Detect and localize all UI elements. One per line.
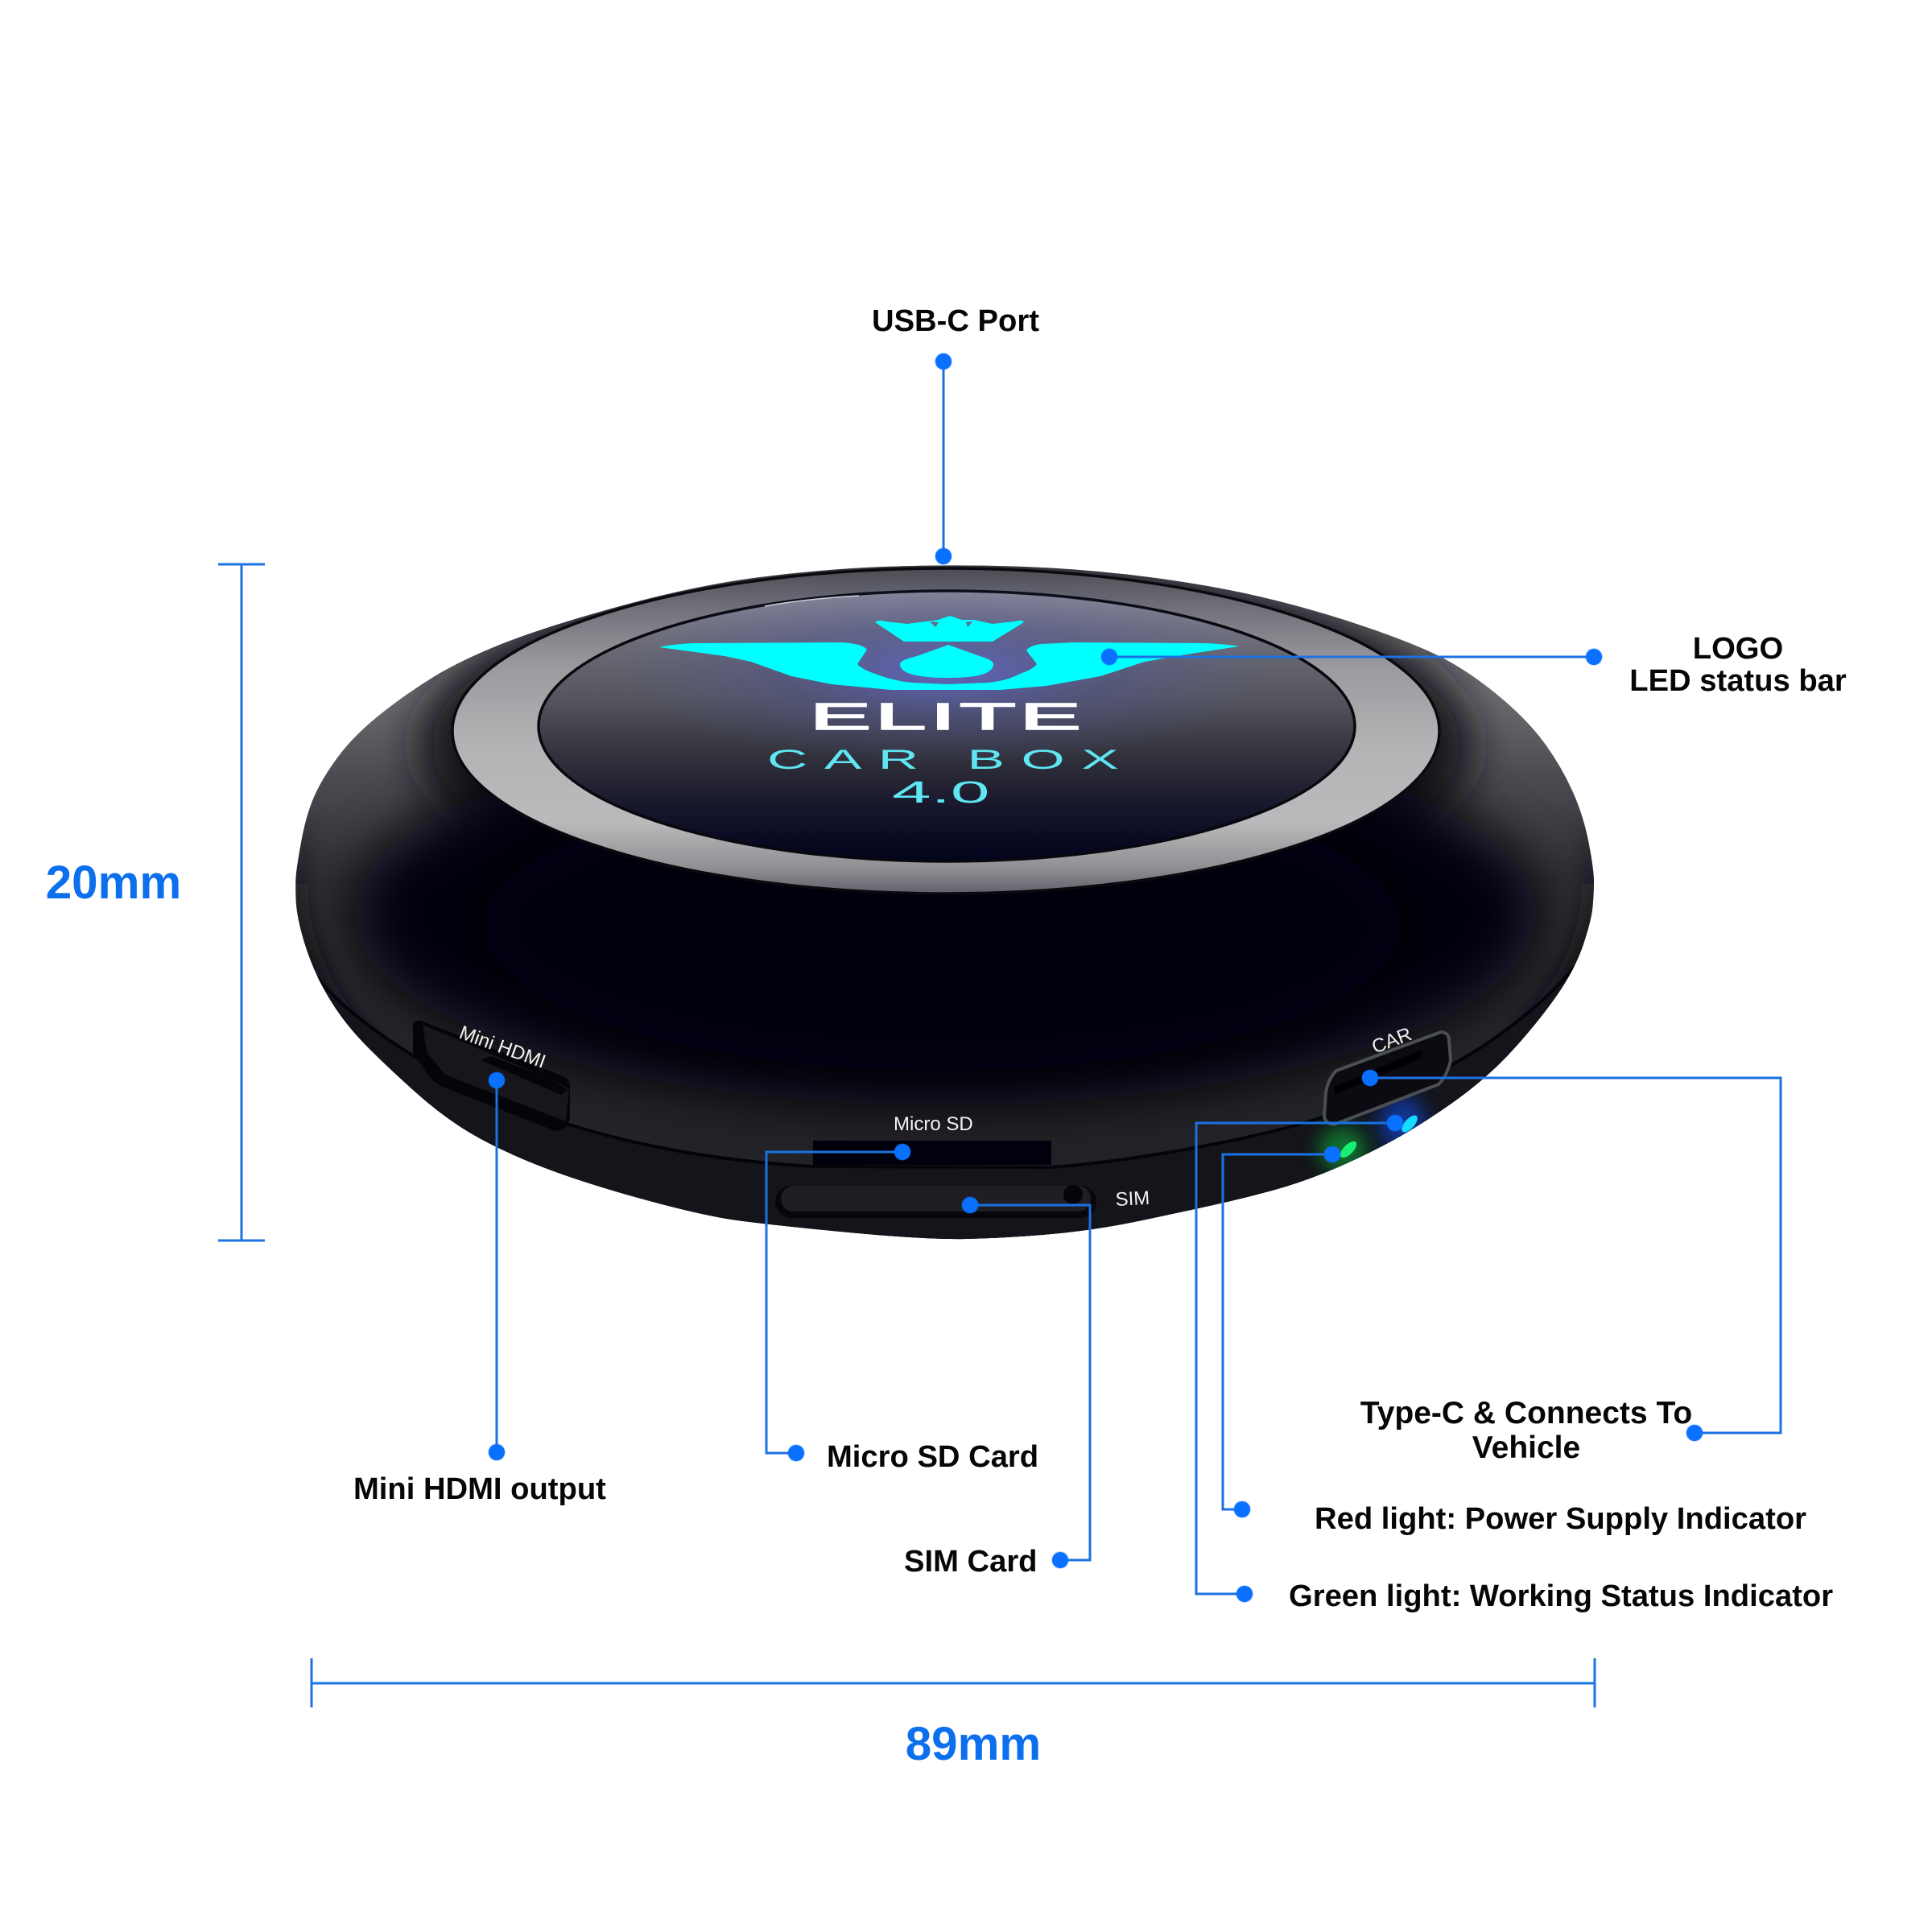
SIM label: SIM (1115, 1187, 1150, 1211)
device: Elite Car Box (282, 558, 1610, 1256)
callout: USB-C Port (872, 303, 1039, 564)
callout: Mini HDMI output: Mini HDMI output (353, 1472, 606, 1506)
callout: Micro SD Card (766, 1144, 1038, 1474)
CAR BOX wordmark: CAR BOX (767, 744, 1135, 774)
callout: USB-C Port: USB-C Port (872, 303, 1039, 338)
logo: crown and wings (659, 616, 1239, 690)
callout: SIM Card: SIM Card (904, 1544, 1038, 1579)
ELITE wordmark: ELITE (810, 696, 1085, 737)
callout: Green light (1196, 1115, 1833, 1613)
Micro SD slot (813, 1141, 1051, 1165)
callout: LOGO LED status bar: LED status bar (1629, 663, 1847, 698)
indicator: green status LED (1338, 1139, 1359, 1160)
disc highlight (765, 596, 859, 606)
wings (659, 642, 1239, 690)
indicator: blue status LED (1399, 1113, 1420, 1135)
callout: Type-C connects to vehicle: Type-C & Connects To (1360, 1396, 1692, 1430)
callout: Red light: Red light: Power Supply Indicator (1315, 1501, 1806, 1536)
callout: LOGO LED status bar: LOGO (1693, 631, 1783, 666)
callout: LOGO LED status bar (1101, 631, 1847, 698)
callout: SIM Card (904, 1197, 1090, 1579)
Mini HDMI port (413, 1021, 570, 1131)
indicator glow: green (1319, 1127, 1367, 1172)
CAR label: CAR (1368, 1023, 1414, 1059)
callout: Type-C connects to vehicle (1360, 1070, 1781, 1465)
dimension: width 89mm (312, 1658, 1595, 1770)
Micro SD label: Micro SD (894, 1113, 973, 1135)
silver ring (452, 568, 1439, 894)
width value: 89mm (906, 1718, 1041, 1770)
callout: Type-C connects to vehicle: Vehicle (1472, 1430, 1580, 1465)
callout: Red light (1223, 1146, 1806, 1536)
dimension: height 20mm (46, 564, 265, 1241)
height value: 20mm (46, 857, 181, 909)
callout: Micro SD Card: Micro SD Card (827, 1439, 1038, 1474)
SIM tray (775, 1185, 1096, 1218)
callout: Mini HDMI output (353, 1072, 606, 1506)
indicator glow: blue (1378, 1096, 1426, 1150)
crown (875, 616, 1024, 642)
drop (900, 645, 993, 678)
callout: Green light: Green light: Working Status Indicator (1289, 1579, 1833, 1613)
CAR port (1324, 1032, 1451, 1125)
device body (282, 558, 1610, 1256)
logo glow (625, 580, 1269, 765)
Mini HDMI port label: Mini HDMI (456, 1022, 548, 1073)
glass disc (539, 591, 1355, 861)
version 4.0: 4.0 (892, 775, 989, 809)
